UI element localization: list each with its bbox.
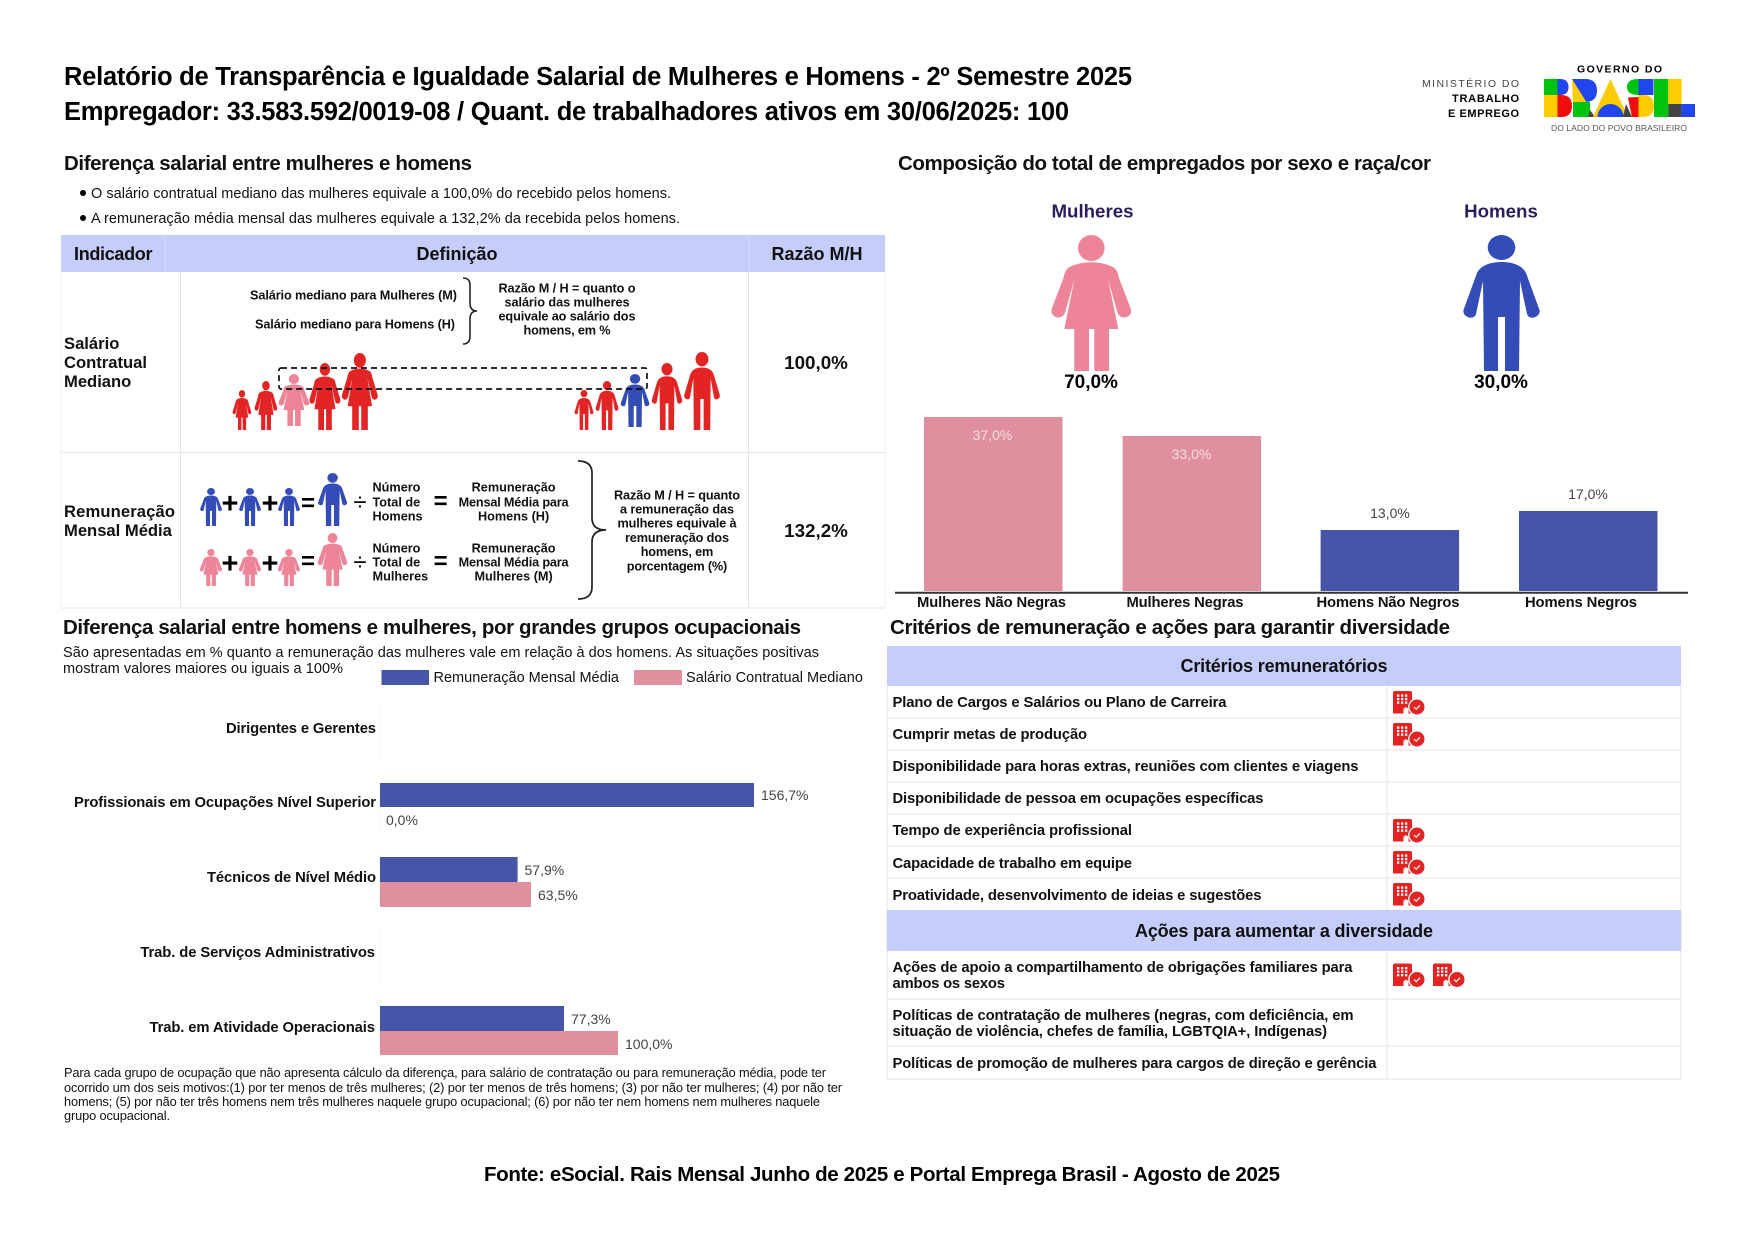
panel: men share: 30,0%: [1474, 372, 1528, 393]
median ratio explanation: salário das mulheres: [504, 296, 630, 310]
row label: remuneração mensal média: Remuneração: [64, 502, 175, 521]
formula: women: +: [262, 548, 278, 580]
median ratio explanation: homens, em %: [524, 324, 610, 338]
bar: homens negros: Homens Negros: [1525, 595, 1637, 611]
footnote: ocorrido um dos seis motivos:(1) por ter menos de três mulheres; (2) por ter menos de três homens; (3) por não ter mulheres; (4) por não ter: [64, 1080, 843, 1095]
formula: men: Mensal Média para: [459, 496, 570, 510]
formula: women: Total de: [372, 556, 420, 570]
logo: ministério do trabalho e emprego: [1422, 77, 1519, 120]
criteria rows: Disponibilidade de pessoa em ocupações específicas: [892, 791, 1264, 807]
bar: homens não negros: Homens Não Negros: [1316, 595, 1460, 611]
criteria rows: Proatividade, desenvolvimento de ideias e sugestões: [892, 888, 1262, 904]
icon: man: [1463, 235, 1540, 371]
panel: men share: [1463, 200, 1540, 393]
formula: men: =: [434, 488, 448, 515]
bar: mulheres não negras: 37,0%: [973, 427, 1012, 443]
legend: Salário Contratual Mediano: [686, 670, 863, 686]
criteria rows: Tempo de experiência profissional: [892, 823, 1132, 839]
icon: woman: [1051, 235, 1131, 371]
dashed median connector: [279, 368, 647, 389]
heading: critérios: Critérios de remuneração e ações para garantir diversidade: [890, 616, 1450, 639]
row label: salário contratual mediano: [64, 334, 147, 391]
formula: men: Remuneração: [472, 480, 556, 494]
category: atividade operacionais: 77,3%: [571, 1011, 611, 1027]
formula: men: Homens (H): [478, 510, 549, 524]
criteria rows: Cumprir metas de produção: [892, 727, 1087, 743]
title: Empregador: 33.583.592/0019-08 / Quant. de trabalhadores ativos em 30/06/2025: 100: [64, 98, 1069, 126]
bar: mulheres não negras: Mulheres Não Negras: [917, 595, 1066, 611]
footnote: grupo ocupacional.: [64, 1108, 170, 1123]
criteria rows: Capacidade de trabalho em equipe: [892, 856, 1132, 872]
median definition text: [250, 288, 457, 332]
category: atividade operacionais: [150, 1006, 672, 1055]
panel: women share: 70,0%: [1064, 372, 1118, 393]
action rows: situação de violência, chefes de família, LGBTQIA+, Indígenas): [892, 1024, 1327, 1040]
logo: governo do brasil: GOVERNO DO: [1577, 64, 1662, 76]
row label: remuneração mensal média: [64, 502, 175, 540]
logo: governo do brasil: DO LADO DO POVO BRASILEIRO: [1551, 123, 1687, 133]
average ratio explanation: [614, 488, 740, 574]
bar: mulheres negras: [1123, 436, 1261, 611]
logo: ministério do trabalho e emprego: TRABALHO: [1452, 93, 1519, 105]
value: remuneração mensal média: 132,2%: [784, 520, 848, 541]
median definition text: Salário mediano para Homens (H): [255, 318, 455, 332]
category: profissionais nível superior: 0,0%: [386, 812, 418, 828]
average ratio explanation: homens, em: [641, 545, 713, 559]
band: critérios remuneratórios: Critérios remuneratórios: [1180, 656, 1388, 676]
bar: mulheres não negras: [917, 417, 1066, 611]
action rows: [892, 960, 1377, 1072]
table header: Definição: [416, 244, 498, 264]
median ratio explanation: equivale ao salário dos: [498, 310, 636, 324]
average ratio explanation: remuneração dos: [625, 531, 729, 545]
footnote: [64, 1065, 843, 1123]
bar: homens negros: 17,0%: [1568, 486, 1608, 502]
median ratio explanation: [498, 282, 636, 338]
logo: ministério do trabalho e emprego: MINISTÉRIO DO: [1422, 77, 1519, 90]
formula: women: ÷: [353, 549, 367, 576]
average ratio explanation: porcentagem (%): [627, 560, 727, 574]
bar: homens não negros: 13,0%: [1370, 505, 1410, 521]
row label: salário contratual mediano: Mediano: [64, 372, 131, 391]
formula: men: +: [262, 488, 278, 520]
band: ações: Ações para aumentar a diversidade: [1135, 921, 1433, 941]
bar chart: occupational groups: [74, 707, 808, 1055]
panel: men share: Homens: [1464, 200, 1538, 222]
action rows: Políticas de contratação de mulheres (negras, com deficiência, em: [892, 1008, 1354, 1024]
row label: remuneração mensal média: Mensal Média: [64, 521, 173, 540]
heading: diferença por grupos ocupacionais: Diferença salarial entre homens e mulheres, por grandes grupos ocupacionais: [63, 616, 801, 639]
formula: women: =: [301, 548, 315, 575]
formula: men: Total de: [372, 496, 420, 510]
bar chart: composition: [895, 417, 1688, 611]
category: atividade operacionais: 100,0%: [625, 1036, 672, 1052]
formula: men: ÷: [353, 489, 367, 516]
formula: women: Mulheres (M): [474, 570, 553, 584]
formula: men: Número: [372, 480, 421, 494]
action rows: Políticas de promoção de mulheres para cargos de direção e gerência: [892, 1056, 1377, 1072]
average ratio explanation: a remuneração das: [620, 502, 734, 516]
formula: women: [200, 533, 570, 586]
panel: women share: Mulheres: [1051, 200, 1134, 222]
bullet text block: O salário contratual mediano das mulheres equivale a 100,0% do recebido pelos homens.: [91, 186, 671, 202]
formula: women: Mensal Média para: [459, 556, 570, 570]
formula: men: +: [222, 488, 238, 520]
chart description: São apresentadas em % quanto a remuneração das mulheres vale em relação à dos homens. As situações positivas: [63, 645, 819, 661]
panel: criteria table: [887, 646, 1681, 1079]
bullet text block: A remuneração média mensal das mulheres equivale a 132,2% da recebida pelos homens.: [91, 211, 680, 227]
formula: men: Homens: [372, 510, 423, 524]
chart description: [63, 645, 819, 677]
category: técnicos de nível médio: 63,5%: [538, 887, 578, 903]
category: técnicos de nível médio: [207, 857, 578, 907]
criteria rows: Disponibilidade para horas extras, reuniões com clientes e viagens: [892, 759, 1358, 775]
legend: Remuneração Mensal Média: [434, 670, 620, 686]
icon: women ordered by salary: [233, 353, 378, 430]
bar: homens negros: [1519, 486, 1658, 611]
source: Fonte: eSocial. Rais Mensal Junho de 2025 e Portal Emprega Brasil - Agosto de 2025: [484, 1163, 1280, 1186]
icons: actions adopted: [1393, 964, 1466, 988]
category: atividade operacionais: Trab. em Atividade Operacionais: [150, 1020, 375, 1036]
category: técnicos de nível médio: Técnicos de Nível Médio: [207, 870, 376, 886]
formula: women: Número: [372, 542, 421, 556]
bullet text block: [80, 186, 680, 227]
action rows: ambos os sexos: [892, 976, 1005, 992]
icons: criteria adopted: [1393, 691, 1426, 908]
formula: women: +: [222, 548, 238, 580]
row label: salário contratual mediano: Contratual: [64, 353, 147, 372]
footnote: homens; (5) por não ter três homens nem três mulheres naquele grupo ocupacional; (6) por não ter nem homens nem mulheres naquele: [64, 1094, 820, 1109]
category: dirigentes e gerentes: Dirigentes e Gerentes: [226, 721, 376, 737]
title: Relatório de Transparência e Igualdade Salarial de Mulheres e Homens - 2º Semestre 2025: [64, 63, 1132, 91]
formula: women: Mulheres: [372, 570, 428, 584]
legend: [382, 670, 863, 686]
category: profissionais nível superior: [74, 783, 808, 828]
formula: women: =: [434, 548, 448, 575]
action rows: Ações de apoio a compartilhamento de obrigações familiares para: [892, 960, 1353, 976]
formula: women: Remuneração: [472, 542, 556, 556]
heading: diferença salarial: Diferença salarial entre mulheres e homens: [64, 152, 472, 175]
bar: mulheres negras: Mulheres Negras: [1126, 595, 1244, 611]
category: profissionais nível superior: Profissionais em Ocupações Nível Superior: [74, 795, 376, 811]
criteria rows: Plano de Cargos e Salários ou Plano de Carreira: [892, 695, 1227, 711]
bracket: average: [578, 461, 606, 599]
logo: ministério do trabalho e emprego: E EMPREGO: [1448, 108, 1519, 120]
chart description: mostram valores maiores ou iguais a 100%: [63, 661, 343, 677]
bar: homens não negros: [1316, 505, 1460, 611]
value: salário contratual mediano: 100,0%: [784, 352, 848, 373]
panel: women share: [1051, 200, 1134, 393]
row label: salário contratual mediano: Salário: [64, 334, 119, 353]
panel: indicator table: [61, 235, 885, 608]
average ratio explanation: Razão M / H = quanto: [614, 488, 740, 502]
table header: Indicador: [74, 244, 152, 264]
median definition text: Salário mediano para Mulheres (M): [250, 288, 457, 302]
category: serviços administrativos: Trab. de Serviços Administrativos: [140, 945, 375, 961]
table header: Razão M/H: [771, 244, 863, 264]
icon: men ordered by salary: [575, 352, 720, 430]
footnote: Para cada grupo de ocupação que não apresenta cálculo da diferença, para salário de contratação ou para remuneração média, pode ter: [64, 1065, 827, 1080]
table header: [61, 235, 885, 272]
band: ações: [887, 910, 1681, 951]
average ratio explanation: mulheres equivale à: [618, 516, 737, 530]
criteria rows: [892, 695, 1358, 904]
category: profissionais nível superior: 156,7%: [761, 787, 808, 803]
category: técnicos de nível médio: 57,9%: [524, 862, 564, 878]
bracket: median: [463, 278, 477, 344]
median ratio explanation: Razão M / H = quanto o: [498, 282, 636, 296]
band: critérios remuneratórios: [887, 646, 1681, 686]
title: [64, 63, 1132, 126]
logo: governo do brasil: [1544, 64, 1695, 133]
formula: men: =: [301, 490, 315, 517]
heading: composição: Composição do total de empregados por sexo e raça/cor: [898, 152, 1431, 175]
formula: men: [200, 473, 570, 526]
bar: mulheres negras: 33,0%: [1172, 446, 1211, 462]
